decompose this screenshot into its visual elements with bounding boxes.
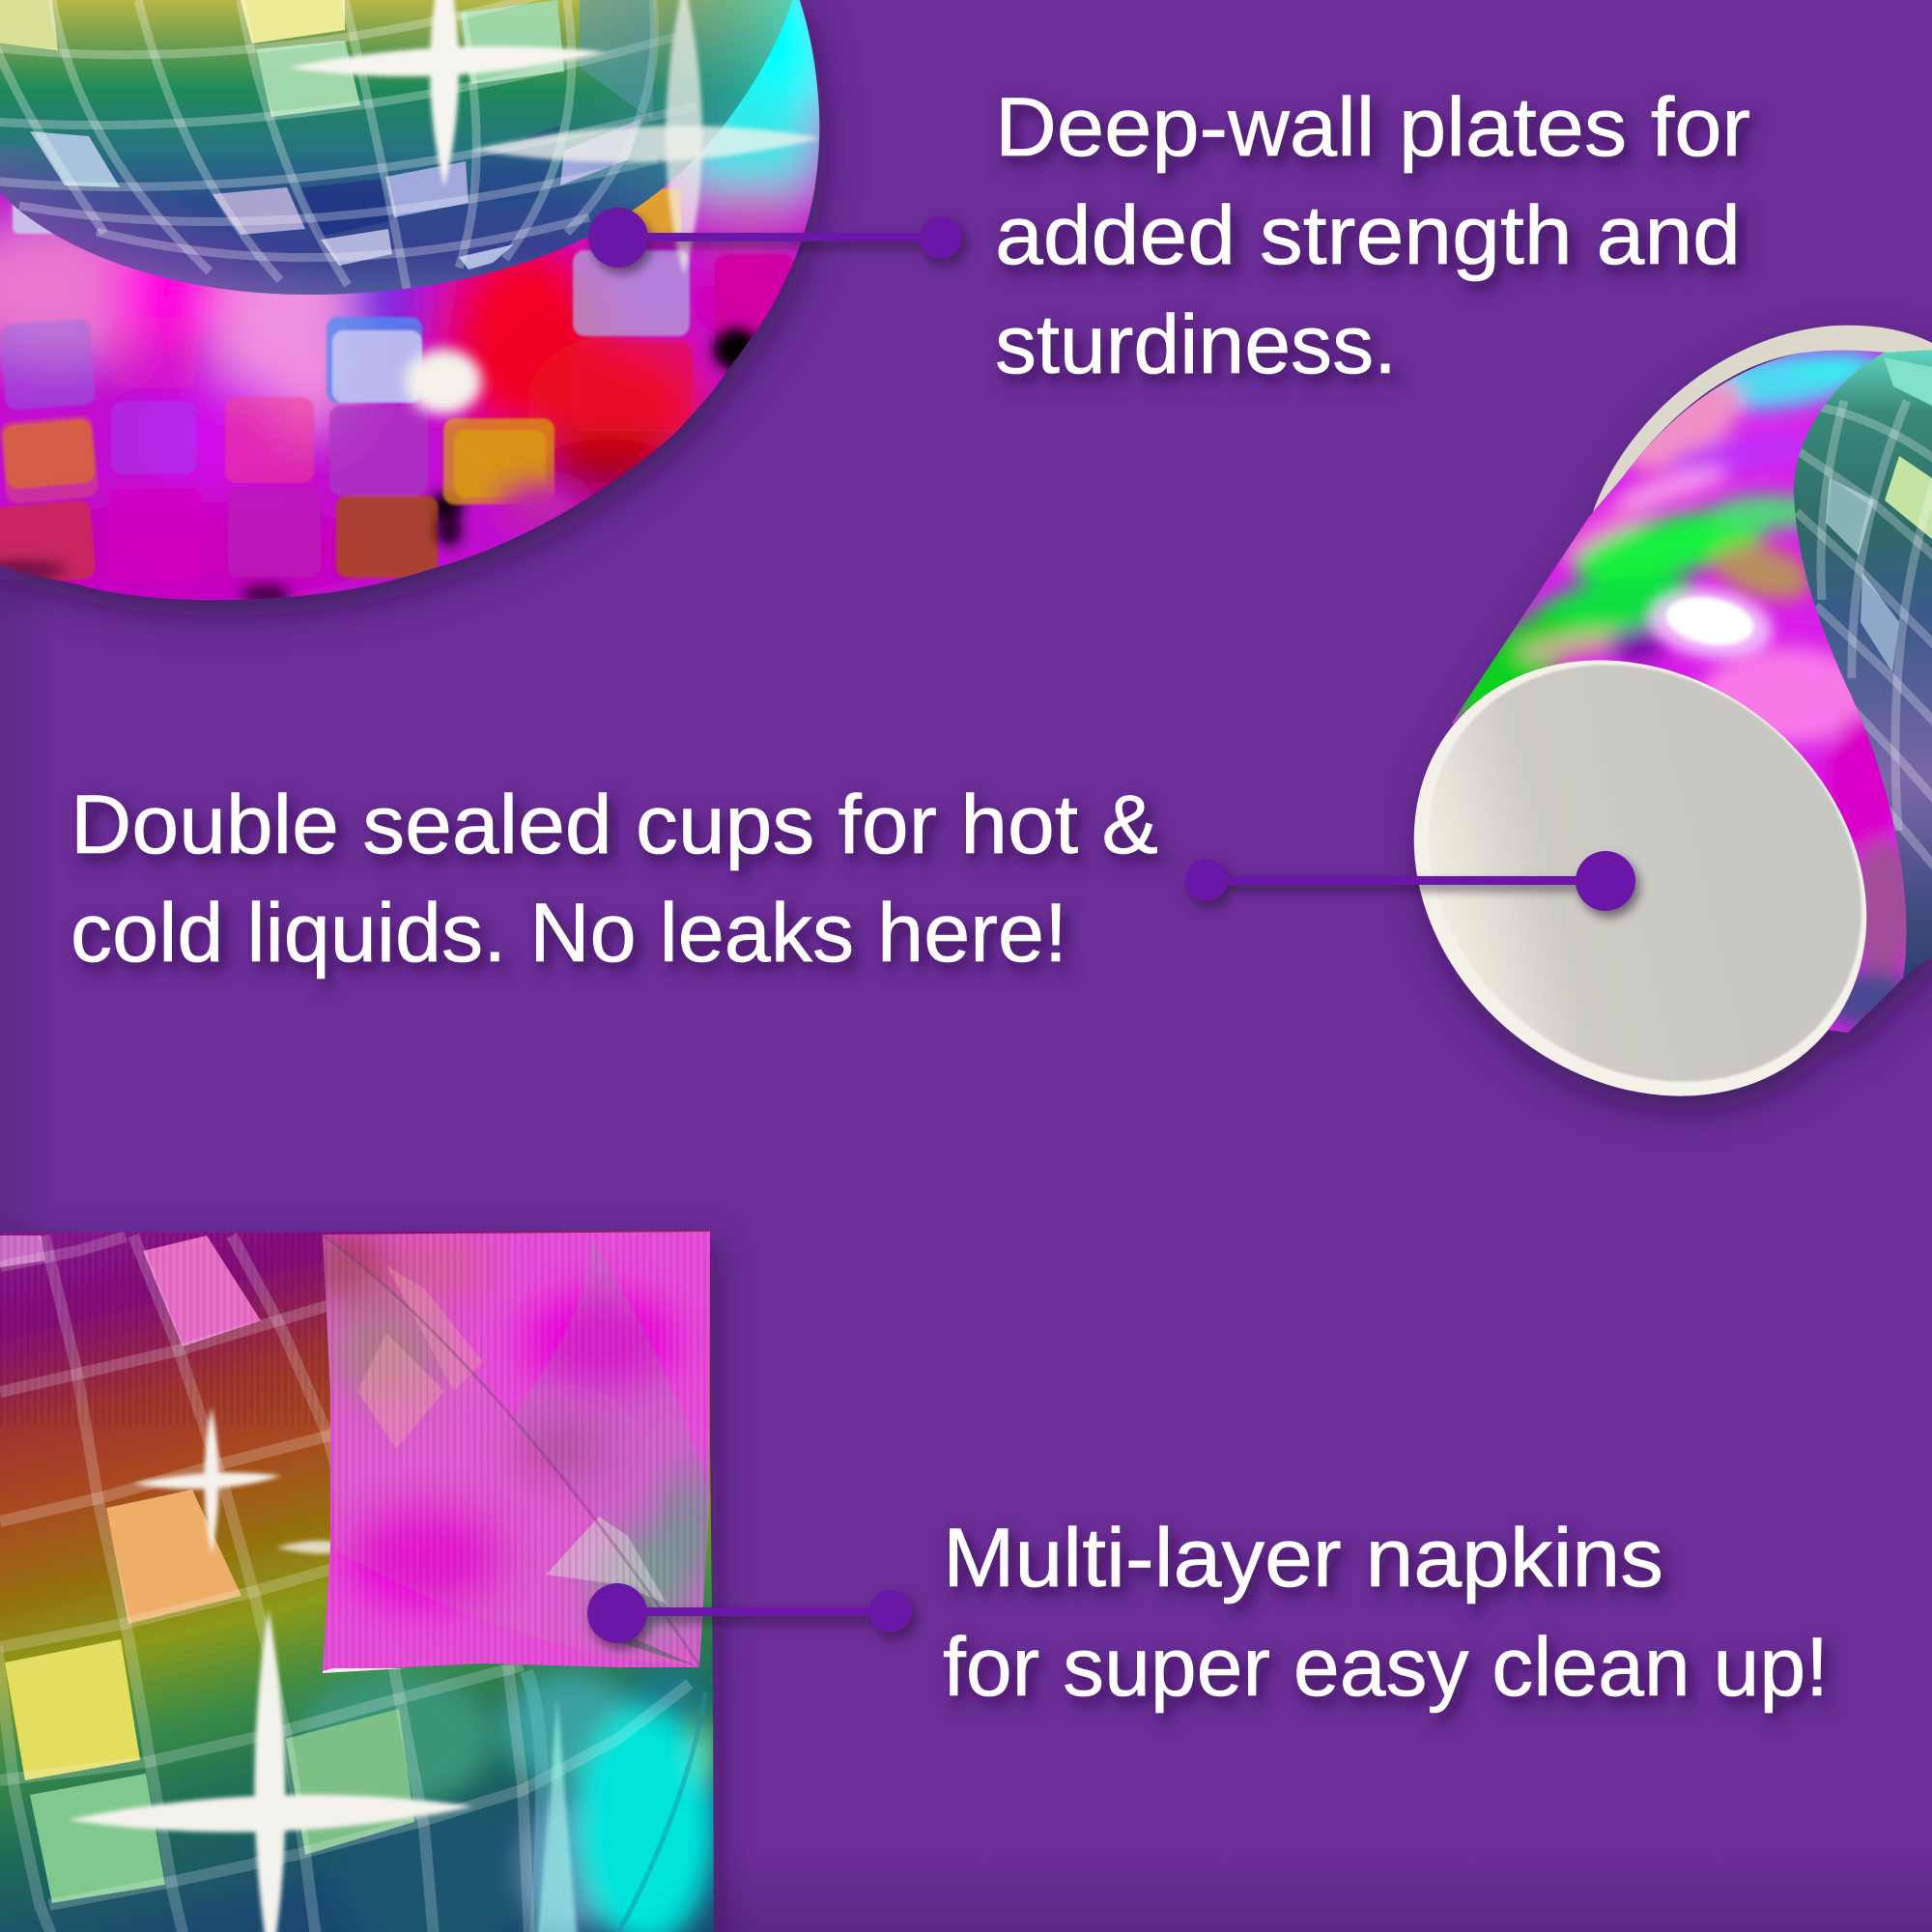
connector: plate callout	[588, 208, 962, 268]
cup body	[1430, 309, 1932, 1063]
text: plate callout: Deep-wall plates for	[995, 81, 1750, 174]
napkin grid lines	[0, 1236, 690, 1932]
panel: plate image	[0, 0, 840, 631]
text: cup callout	[71, 779, 1158, 980]
panel: cup image	[1405, 325, 1932, 1126]
plate dark gaps	[0, 328, 759, 603]
plate glow spot	[405, 349, 584, 532]
napkin ball light tiles	[0, 1236, 414, 1903]
napkin rib texture	[0, 1233, 333, 1426]
text: plate callout: sturdiness.	[995, 298, 1397, 391]
cup base	[1326, 570, 1932, 1186]
text: napkin callout: for super easy clean up!	[943, 1621, 1829, 1714]
connector: cup callout	[1185, 851, 1635, 911]
text: plate callout	[995, 81, 1750, 391]
text: plate callout: added strength and	[995, 189, 1741, 282]
disco ball on cup	[1787, 343, 1932, 990]
disco ball on plate	[0, 0, 821, 309]
sparkles on plate	[288, 0, 821, 275]
napkin cyan corner	[299, 1665, 717, 1932]
ball light tiles	[0, 0, 653, 270]
text: cup callout: cold liquids. No leaks here!	[71, 887, 1067, 980]
napkin fold	[304, 1227, 724, 1681]
napkin ball edge	[526, 1671, 542, 1932]
text: napkin callout	[943, 1512, 1829, 1714]
text: napkin callout: Multi-layer napkins	[943, 1512, 1663, 1605]
napkin fold corner edge	[323, 1668, 406, 1673]
fold sheen lens	[323, 1236, 699, 1665]
napkin sparkles	[68, 1406, 578, 1932]
text: cup callout: Double sealed cups for hot &	[71, 779, 1158, 871]
ball grid lines	[0, 0, 696, 289]
connector: napkin callout	[587, 1583, 912, 1643]
plate tiles	[0, 188, 795, 586]
cup rim	[1593, 326, 1932, 512]
panel: napkin image	[0, 1227, 724, 1932]
plate colour glow	[0, 0, 840, 630]
